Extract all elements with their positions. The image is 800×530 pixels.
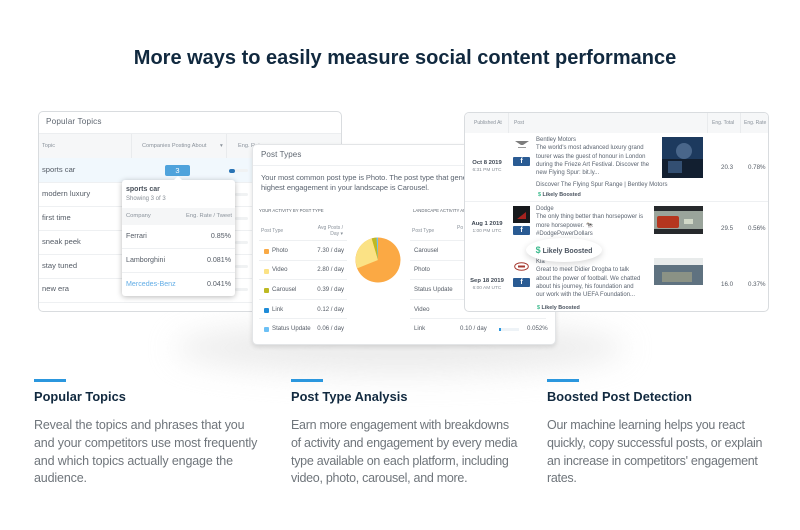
topic: modern luxury: modern luxury (42, 189, 90, 198)
tooltip pointer (173, 176, 183, 181)
post text: Great to meet Didier Drogba to talk (536, 267, 629, 273)
panel: boosted posts table (464, 112, 769, 312)
engagement total: 29.5 (721, 225, 733, 232)
header: post type: Post Type (412, 228, 434, 234)
tooltip: sports car companies (122, 180, 235, 296)
total column: Eng. Total (712, 120, 734, 126)
time: 6:00 AM UTC (473, 286, 501, 291)
row: Photo: Photo (414, 266, 430, 273)
accent bar (547, 379, 579, 382)
photo (654, 206, 703, 234)
row: Status Update: Status Update (414, 286, 453, 293)
sort arrow: ▾ (220, 143, 223, 149)
rate column: Eng. Rate (744, 120, 766, 126)
rate label: Eng. Rate / Tweet (186, 213, 232, 219)
engagement column label: Eng. Rate (238, 143, 263, 149)
row: Carousel: Carousel (414, 247, 438, 254)
panel heading: Post Types (261, 150, 301, 159)
facebook badge (513, 157, 530, 166)
description: Earn more engagement with breakdowns (291, 418, 509, 432)
post column: Post (514, 120, 524, 126)
link engagement bar (499, 328, 519, 331)
topic: new era: new era (42, 284, 69, 293)
description: an increase in competitors' engagement (547, 454, 758, 468)
facebook badge: f (520, 279, 523, 286)
feature: post type analysis (291, 379, 518, 485)
row: Carousel (264, 286, 344, 293)
row: Link: Link (272, 306, 283, 313)
subheading: your activity: YOUR ACTIVITY BY POST TYPE (259, 208, 324, 213)
row: Carousel: 0.39 / day (317, 286, 344, 293)
row: Video: 2.80 / day (317, 266, 344, 273)
post: Kia (470, 258, 766, 311)
description: type available on each platform, including (291, 454, 509, 468)
row: Photo: Photo (272, 247, 288, 254)
description (34, 418, 258, 485)
company label: Company (126, 213, 151, 219)
topic: sports car: sports car (42, 165, 75, 174)
callout: likely boosted (526, 238, 602, 262)
summary text: Your most common post type is Photo. The post type that generates the (261, 173, 496, 182)
post text (536, 136, 649, 176)
post text: more horsepower. 🐄 (536, 223, 593, 229)
link label: Link (414, 325, 425, 332)
post text: #DodgePowerDollars (536, 231, 593, 237)
company: Lamborghini: Lamborghini (126, 256, 165, 264)
topic: first time: first time (42, 213, 71, 222)
row: Video: Video (272, 266, 287, 273)
row: Status Update: 0.06 / day (317, 325, 344, 332)
description: Our machine learning helps you react (547, 418, 745, 432)
shadow beneath screenshots (175, 322, 625, 374)
header: avg posts: Day ▾ (330, 231, 343, 237)
time: 6:31 PM UTC (472, 168, 502, 173)
count badge (165, 165, 190, 176)
summary text (261, 173, 496, 192)
description: rates. (547, 471, 577, 485)
tooltip subtitle: Showing 3 of 3 (126, 196, 166, 202)
date: Oct 8 2019 (472, 160, 502, 166)
photo (662, 137, 703, 178)
landscape table (410, 225, 548, 332)
link title: Discover The Flying Spur Range | Bentley Motors (536, 182, 668, 188)
description (291, 418, 518, 485)
engagement rate: 0.78% (748, 164, 766, 171)
panel: post types (252, 144, 556, 345)
facebook badge (513, 226, 530, 235)
rate: Ferrari: 0.85% (211, 232, 231, 240)
table header (39, 133, 343, 158)
row: Status Update: Status Update (272, 325, 311, 332)
likely boosted tag: $ Likely Boosted (538, 192, 581, 198)
feature: boosted post detection (547, 379, 762, 485)
post text (536, 258, 640, 298)
post text: The only thing better than horsepower is (536, 214, 643, 220)
row: Link (264, 306, 344, 313)
table header (465, 113, 770, 133)
published column: Published At (474, 120, 502, 126)
rate: Mercedes-Benz: 0.041% (207, 280, 231, 288)
header: avg posts: Po (457, 225, 463, 231)
facebook badge: f (520, 227, 523, 234)
post text (536, 206, 643, 237)
facebook badge (513, 278, 530, 287)
post text: about his journey, his foundation and (536, 284, 634, 290)
description: and which topics actually engage the (34, 454, 233, 468)
heading: Post Type Analysis (291, 389, 407, 404)
header: avg posts (318, 225, 343, 237)
row: Status Update (264, 325, 344, 332)
accent bar (291, 379, 323, 382)
date: Sep 18 2019 (470, 278, 504, 284)
engagement total: 16.0 (721, 281, 733, 288)
description: audience. (34, 471, 87, 485)
description: quickly, copy successful posts, or explain (547, 436, 762, 450)
post text: Dodge (536, 206, 554, 212)
activity table (259, 225, 347, 332)
post text: The world's most advanced luxury grand (536, 145, 644, 151)
tooltip header (122, 208, 235, 225)
company: Mercedes-Benz: Mercedes-Benz (126, 280, 176, 288)
highlighted row (39, 158, 343, 182)
accent bar (34, 379, 66, 382)
heading: Boosted Post Detection (547, 389, 692, 404)
topic column label: Topic (42, 143, 55, 149)
post text: about the power of football. We chatted (536, 276, 640, 282)
post: Bentley Motors (472, 136, 766, 198)
time: 1:00 PM UTC (472, 229, 502, 234)
description (547, 418, 762, 485)
Kia logo (514, 262, 529, 271)
post text: tourer was the guest of honour in London (536, 154, 645, 160)
description: of activity and engagement by every media (291, 436, 517, 450)
post text: our work with the UEFA Foundation... (536, 292, 635, 298)
row: Photo (264, 247, 344, 254)
companies column label: Companies Posting About (142, 143, 206, 149)
description: video, photo, carousel, and more. (291, 471, 467, 485)
header: avg posts: Avg Posts / (318, 225, 343, 231)
rate: Lamborghini: 0.081% (207, 256, 231, 264)
company: Ferrari: Ferrari (126, 232, 147, 240)
engagement rate: 0.37% (748, 281, 766, 288)
row: Link (414, 325, 548, 332)
likely boosted tag: $ Likely Boosted (537, 305, 580, 311)
Dodge logo (513, 206, 530, 223)
panel heading: Popular Topics (46, 117, 102, 126)
post text: during the Frieze Art Festival. Discover the (536, 162, 649, 168)
post text: Kia (536, 259, 545, 265)
row: Photo: 7.30 / day (317, 247, 344, 254)
row: Link: 0.12 / day (317, 306, 344, 313)
description: Reveal the topics and phrases that you (34, 418, 244, 432)
photo (654, 258, 703, 285)
callout: likely boosted: $ Likely Boosted (536, 245, 592, 255)
panel: popular topics (38, 111, 342, 312)
post text: new Flying Spur: bit.ly... (536, 170, 599, 176)
feature: popular topics (34, 379, 258, 485)
summary text: highest engagement in your landscape is Carousel. (261, 183, 429, 192)
topic: sneak peek: sneak peek (42, 237, 81, 246)
post text: Bentley Motors (536, 137, 576, 143)
subheading: landscape activity: LANDSCAPE ACTIVITY AND ENGAGEMENT (413, 208, 501, 213)
description: and your competitors use most frequently (34, 436, 257, 450)
date: Aug 1 2019 (471, 221, 503, 227)
topic: stay tuned: stay tuned (42, 261, 77, 270)
title: More ways to easily measure social content performance (134, 47, 676, 69)
engagement total: 20.3 (721, 164, 733, 171)
row: Video (264, 266, 344, 274)
count badge: 3 (175, 166, 180, 175)
heading: Popular Topics (34, 389, 126, 404)
link engagement value: 0.052% (527, 325, 548, 332)
tooltip title: sports car (126, 186, 160, 193)
facebook badge: f (520, 158, 523, 165)
Bentley logo (515, 141, 529, 148)
post: Dodge (471, 206, 766, 237)
row: Carousel: Carousel (272, 286, 296, 293)
engagement rate: 0.56% (748, 225, 766, 232)
engagement bar (229, 169, 235, 173)
row: Video: Video (414, 306, 429, 313)
header: post type: Post Type (261, 228, 283, 234)
pie chart (356, 238, 400, 282)
row labels (42, 165, 90, 293)
link posts per day: 0.10 / day (460, 325, 487, 332)
